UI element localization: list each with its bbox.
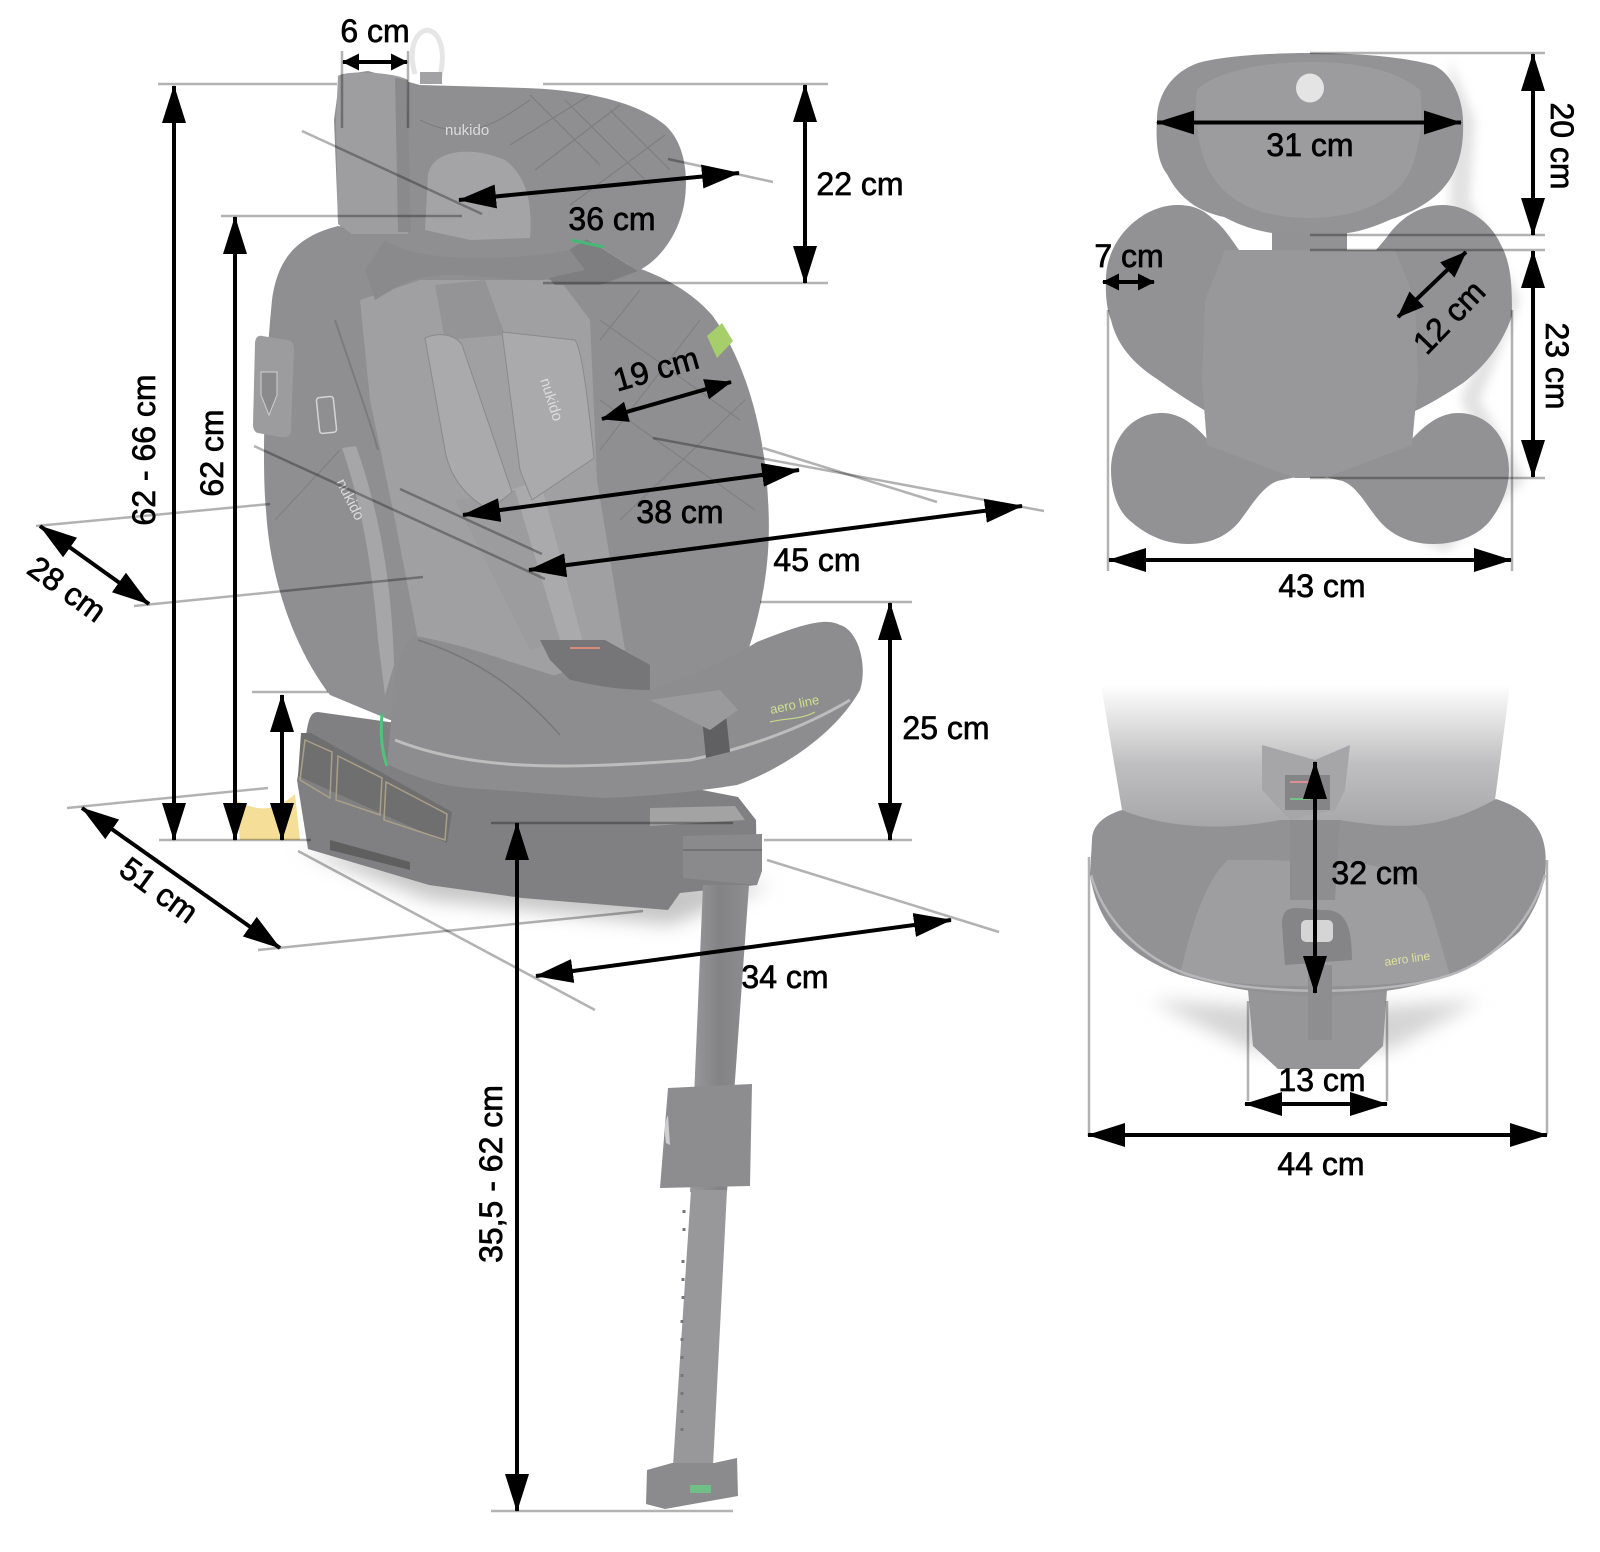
side logo: nukido bbox=[332, 476, 368, 523]
base under seat bbox=[1248, 990, 1387, 1069]
headrest bbox=[334, 71, 686, 300]
arrow and label: 35,5-62 cm: 35,5 - 62 cm bbox=[473, 1085, 509, 1263]
insert shadow bbox=[1420, 60, 1525, 552]
isofix base bbox=[297, 712, 757, 910]
arrow and label: 34 cm bbox=[536, 920, 951, 995]
arrow and label: 36 cm: 36 cm bbox=[568, 201, 656, 237]
floor shadow bbox=[300, 850, 770, 925]
arrow and label: 12 cm: 12 cm bbox=[1406, 273, 1492, 361]
arrow and label: 6 cm headrest depth: 6 cm bbox=[340, 13, 410, 49]
head support bbox=[1157, 53, 1463, 233]
seat cushion front bbox=[1090, 799, 1546, 996]
arrow and label: 45 cm: 45 cm bbox=[773, 542, 861, 578]
arrow and label: 7 cm: 7 cm bbox=[1094, 238, 1164, 274]
extension lines: seat front bbox=[1089, 857, 1547, 1134]
arrow and label: 38 cm bbox=[463, 470, 799, 530]
extension lines: insert bbox=[1108, 53, 1545, 571]
backrest quilt lines bbox=[275, 290, 755, 520]
arrow and label: 20 cm: 20 cm bbox=[1544, 102, 1580, 190]
arrow and label: 34 cm: 34 cm bbox=[741, 959, 829, 995]
arrow and label: 23 cm: 23 cm bbox=[1539, 322, 1575, 410]
arrow and label: 13 cm: 13 cm bbox=[1278, 1062, 1366, 1098]
seat cushion: aero line bbox=[769, 692, 820, 717]
insert cushion top view bbox=[1106, 53, 1525, 552]
car seat side view bbox=[253, 30, 863, 1509]
green tag bbox=[707, 323, 733, 358]
arrow and label: 32 cm: 32 cm bbox=[1331, 855, 1419, 891]
side magnet pad bbox=[253, 336, 337, 437]
arrow and label: 31 cm: 31 cm bbox=[1266, 127, 1354, 163]
faded backrest bbox=[1101, 685, 1510, 860]
body and side wings bbox=[1106, 205, 1512, 544]
shoulder pads: nukido bbox=[536, 376, 566, 423]
arrow and label: 62 cm: 62 cm bbox=[194, 409, 230, 497]
arrow and label: 28 cm: 28 cm bbox=[21, 549, 113, 629]
buckle and pull tab bbox=[1262, 745, 1352, 1040]
arrow and label: 44 cm: 44 cm bbox=[1277, 1146, 1365, 1182]
floor shadow bbox=[1150, 1000, 1480, 1050]
carry hook bbox=[412, 30, 442, 84]
harness straps and buckle bbox=[435, 280, 650, 700]
yellow floor patch bbox=[236, 794, 300, 840]
arrow and label: 28 cm bbox=[21, 526, 149, 629]
front seam bbox=[1091, 875, 1545, 991]
backrest shell bbox=[264, 226, 769, 720]
logo circle bbox=[1296, 74, 1324, 102]
head mesh panel bbox=[1196, 62, 1422, 218]
green seam bbox=[381, 714, 387, 766]
arrow and label: 25 cm: 25 cm bbox=[902, 710, 990, 746]
seat inner pad bbox=[360, 280, 625, 695]
arrow: seat height bbox=[280, 695, 284, 840]
arrow and label: 43 cm: 43 cm bbox=[1278, 568, 1366, 604]
arrow and label: 51 cm: 51 cm bbox=[113, 850, 205, 930]
side bolster trim bbox=[342, 446, 394, 695]
arrow and label: 51 cm bbox=[82, 808, 280, 948]
aero line mark: aero line bbox=[1383, 949, 1431, 969]
arrow and label: 19 cm: 19 cm bbox=[609, 340, 703, 398]
headrest: nukido bbox=[445, 122, 489, 139]
neck strap join bbox=[540, 238, 638, 285]
arrow and label: 62-66 cm height: 62 - 66 cm bbox=[126, 374, 162, 526]
arrow and label: 19 cm bbox=[602, 340, 731, 419]
extension lines: side view bbox=[36, 51, 1044, 1511]
center mesh bbox=[1202, 250, 1418, 478]
arrow and label: 38 cm: 38 cm bbox=[636, 494, 724, 530]
arrow and label: 22 cm: 22 cm bbox=[816, 166, 904, 202]
arrow and label: 45 cm bbox=[529, 506, 1022, 578]
arrow and label: 36 cm bbox=[459, 173, 739, 237]
support leg bbox=[646, 834, 762, 1509]
center panel bbox=[1180, 860, 1450, 986]
seat cushion bbox=[387, 622, 863, 798]
seat front view bbox=[1090, 685, 1546, 1069]
shoulder pads bbox=[425, 332, 594, 510]
